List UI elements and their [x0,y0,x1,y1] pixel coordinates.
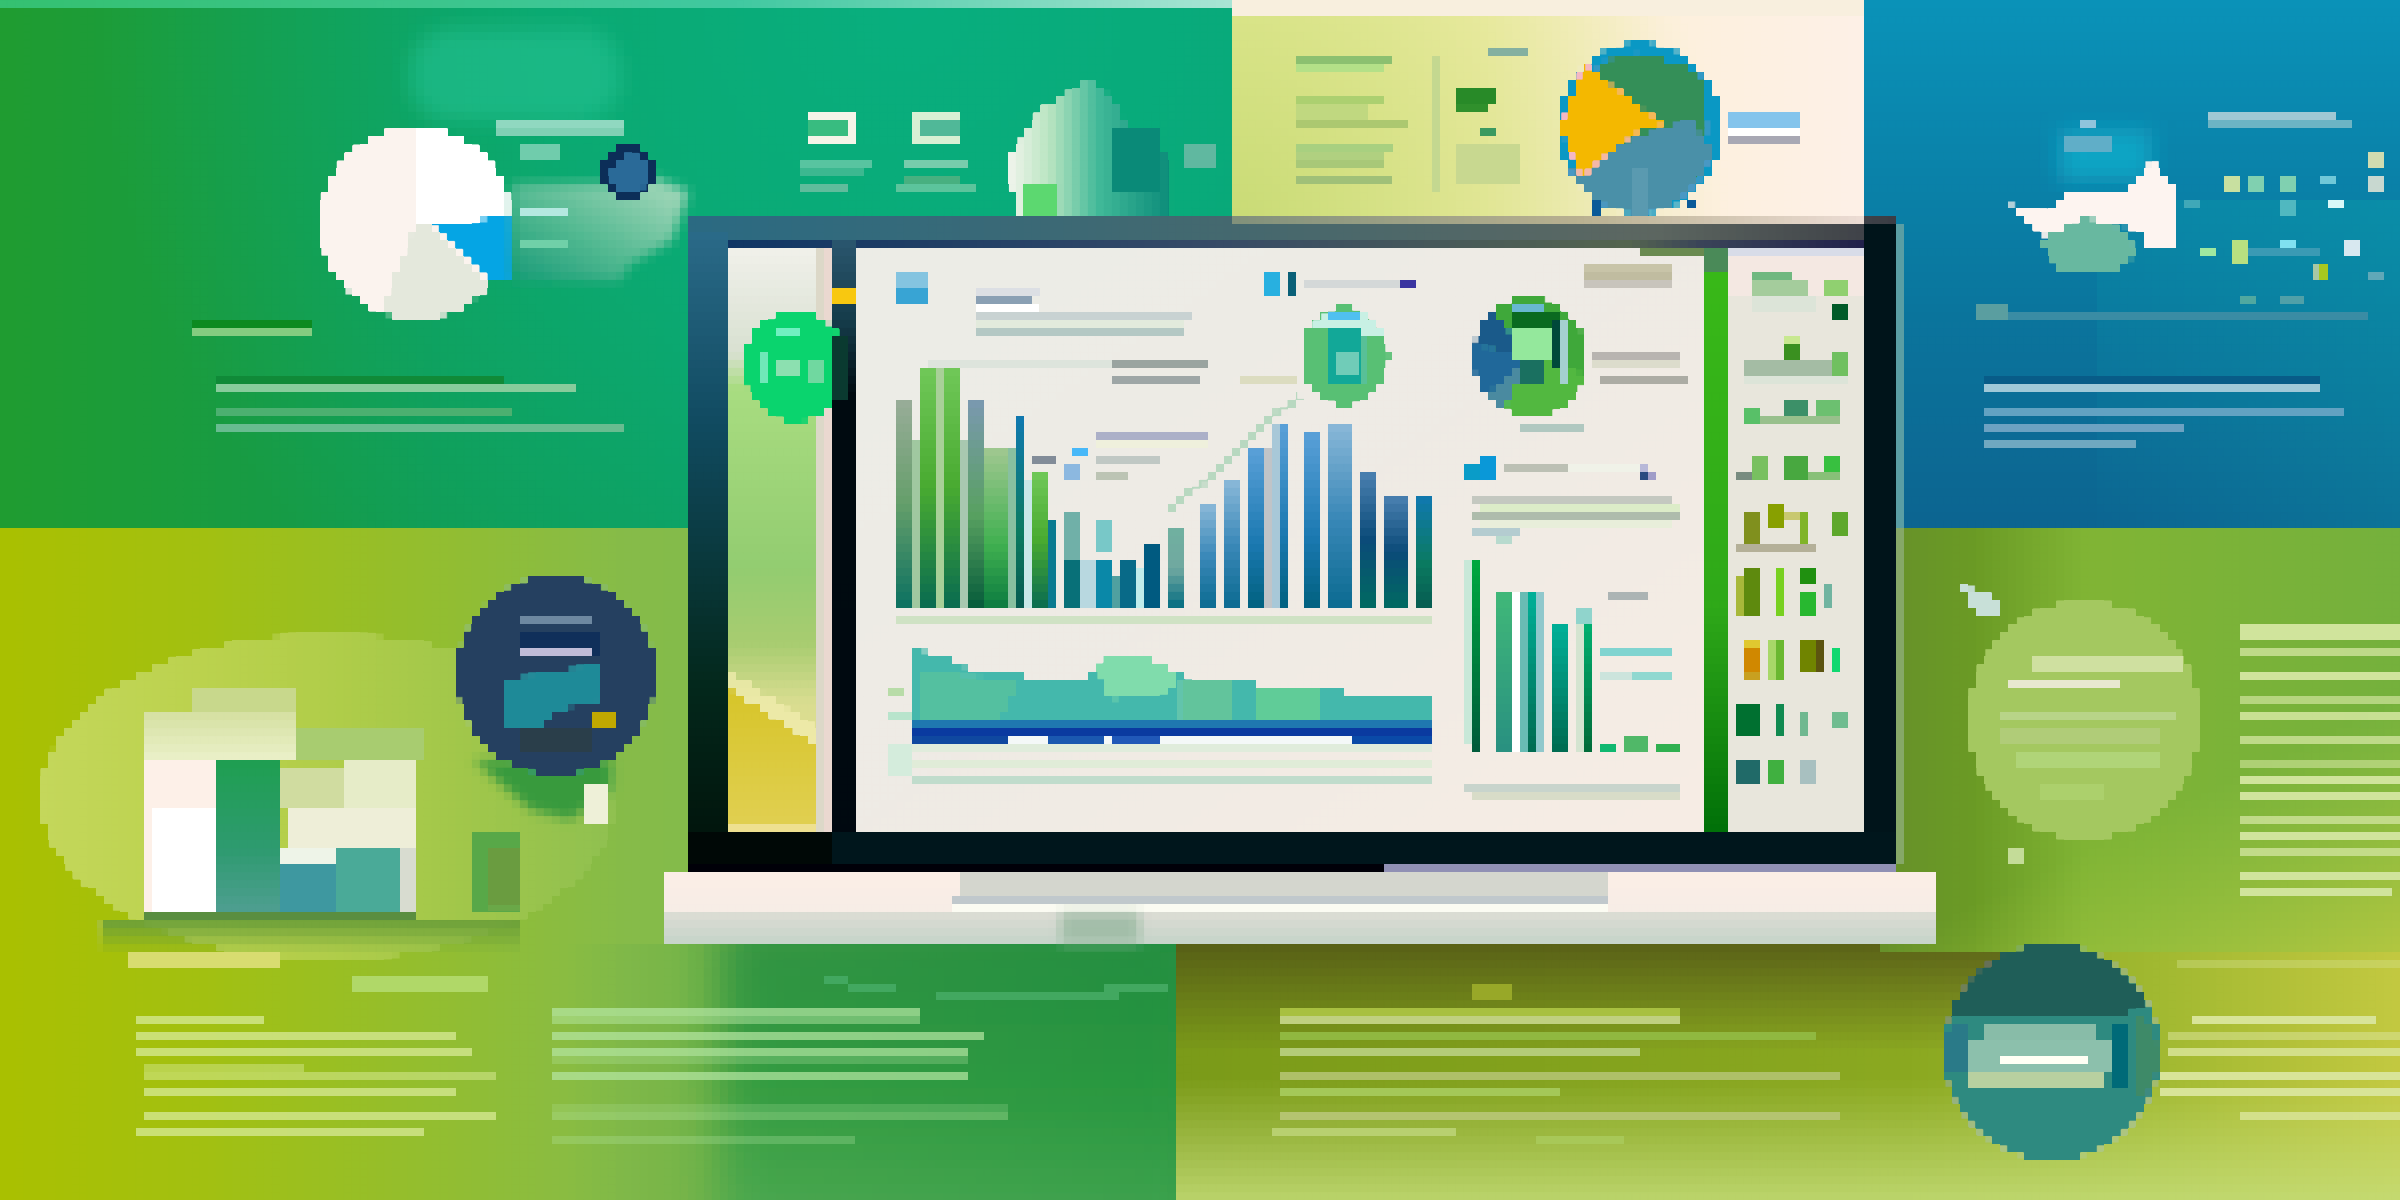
laptop base [664,872,1936,944]
header row: left [896,272,1192,336]
icon: small dark circle [600,144,656,200]
text block: top center yellow panel [1296,48,1528,192]
callout: over bars [1032,432,1208,482]
text block: bottom right [2160,960,2400,1120]
text block: bottom center [1272,984,1840,1144]
header row: lower right [1464,456,1656,480]
pie chart: top left [320,127,512,319]
main screen panel [856,248,1704,831]
trend line [1170,395,1300,510]
text block: above donut [1520,264,1688,432]
map illustration: top right [2008,130,2176,272]
accent bar [1640,248,1728,831]
illustration: top blob [1008,80,1214,216]
text block: right column [2240,624,2400,896]
glow: top left teal bloom [410,30,620,120]
bar: small chart beside house [472,832,520,912]
donut chart: right of screen [1473,296,1586,418]
pie chart: top center [1558,42,1722,216]
right panel: list of mini charts [1728,248,1864,831]
icon: green badge on sidebar [743,310,848,422]
area chart [888,648,1432,784]
dark circle: bottom left [456,575,656,820]
cream tab under dark circle [584,784,608,824]
laptop bezel [688,216,1904,872]
progress ring [1301,306,1389,406]
text block: bottom column one [136,1016,496,1136]
big circle: bottom left halo [40,634,616,960]
bar chart: main [896,368,1432,624]
text block: top right [1976,304,2368,448]
text block: lower right [1472,496,1680,544]
teal circle: bottom right [1944,944,2160,1160]
icon: yellow tab [832,288,856,304]
faint marks: above bottom column two [824,976,1168,1000]
leaf callout top left [496,120,688,280]
sidebar panel [728,248,832,831]
bar chart: lower right [1464,560,1680,800]
shadow under house [100,920,520,990]
scatter dots: top right [2064,112,2384,304]
sub heading rows [928,360,1300,384]
house chart: bottom left [144,688,424,920]
text block: bottom column two [552,1008,1008,1144]
label: pie legend [1728,112,1800,144]
header row: center [1264,272,1416,296]
text block: top left [192,320,624,432]
speech circle: right [1960,584,2200,864]
icons: top center [800,112,976,192]
